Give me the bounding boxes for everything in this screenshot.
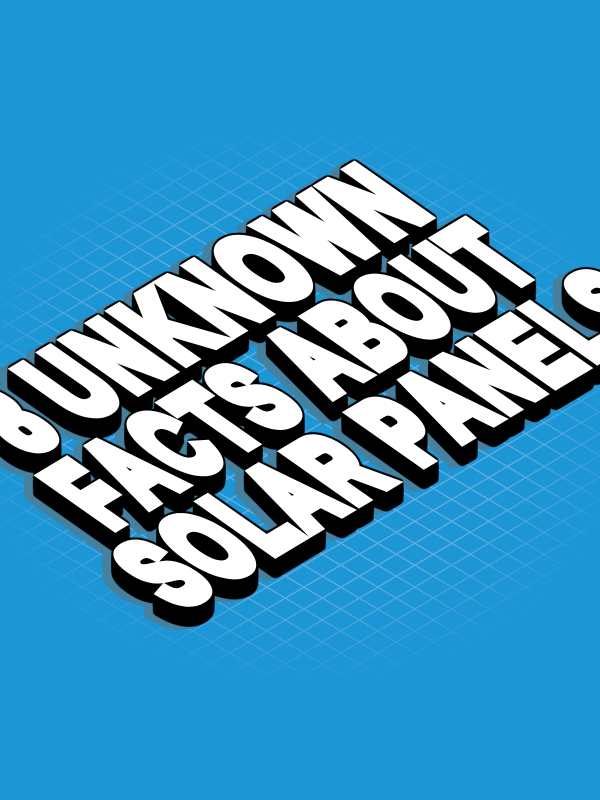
title line 2: FACTS ABOUT bbox=[17, 203, 565, 544]
title bbox=[0, 147, 600, 625]
isometric grid bbox=[0, 133, 600, 677]
infographic canvas bbox=[0, 133, 600, 677]
